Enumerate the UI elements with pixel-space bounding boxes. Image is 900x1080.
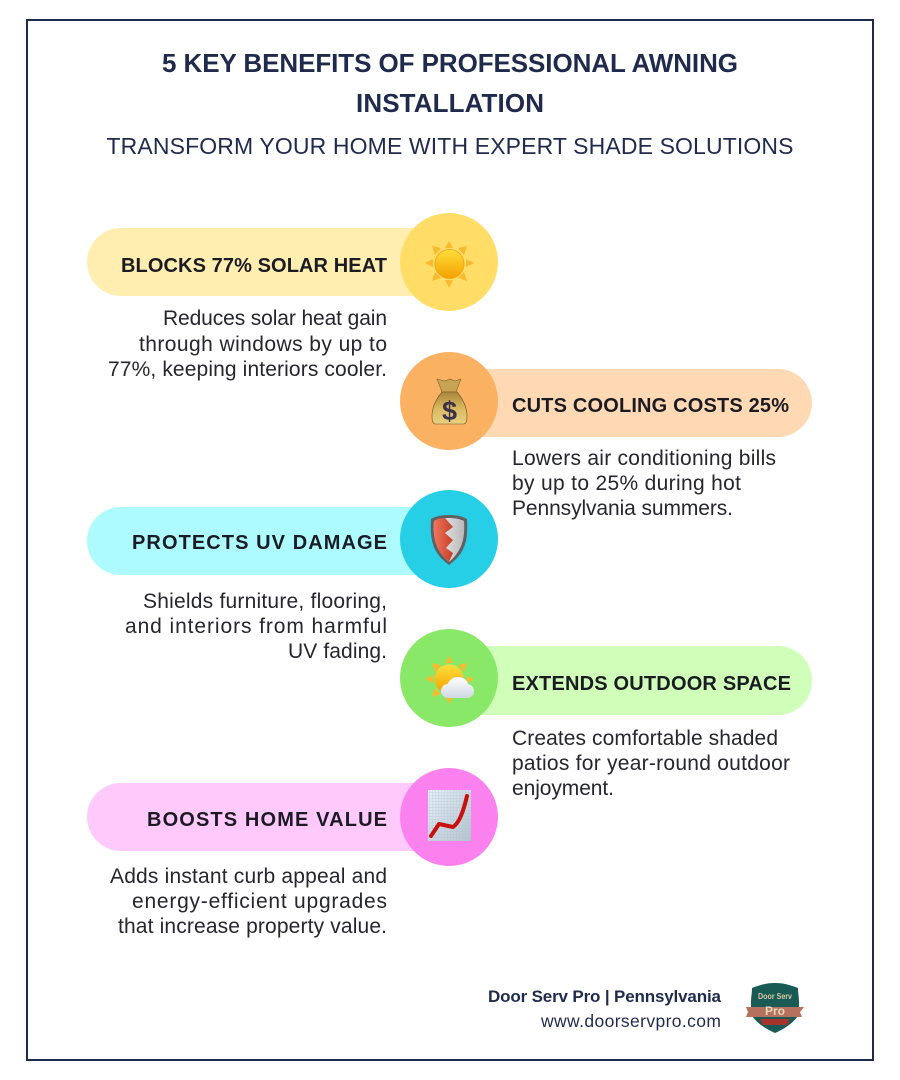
footer: company details	[488, 987, 722, 1031]
description: blocks solar heat: 77%, keeping interiors cooler.	[108, 358, 387, 381]
logo: Door Serv Pro badge	[746, 983, 804, 1033]
title	[162, 48, 738, 118]
pill: blocks solar heat	[87, 228, 447, 296]
pill: boosts home value	[87, 783, 447, 851]
circle: orange	[400, 352, 498, 450]
description: protects UV damage: and interiors from harmful	[125, 615, 387, 638]
icon: sun behind cloud	[425, 656, 474, 704]
icon: sun	[425, 241, 474, 288]
logo: Door Serv Pro badge: Door Serv	[758, 992, 792, 1001]
description: boosts home value	[110, 865, 387, 938]
description: extends outdoor space	[512, 727, 790, 800]
heading: cuts cooling costs: CUTS COOLING COSTS 25%	[512, 395, 789, 417]
title: 5 KEY BENEFITS OF PROFESSIONAL AWNING	[162, 48, 738, 78]
benefit 5: home value	[87, 768, 498, 866]
heading: boosts home value: BOOSTS HOME VALUE	[147, 809, 387, 831]
heading: extends outdoor space: EXTENDS OUTDOOR SPACE	[512, 673, 791, 695]
logo: Door Serv Pro badge: Pro	[765, 1004, 785, 1018]
description: blocks solar heat: Reduces solar heat gain	[163, 307, 387, 330]
icon: shield	[431, 515, 467, 565]
circle: cyan	[400, 490, 498, 588]
description: cuts cooling costs: by up to 25% during hot	[512, 472, 741, 495]
circle: green	[400, 629, 498, 727]
description: boosts home value: energy-efficient upgrades	[132, 890, 387, 913]
pill: extends outdoor space	[452, 646, 812, 715]
heading: protects UV damage: PROTECTS UV DAMAGE	[132, 532, 387, 554]
description: cuts cooling costs: Pennsylvania summers.	[512, 497, 733, 520]
pill: cuts cooling costs	[452, 369, 812, 437]
benefit 4: outdoor space	[400, 629, 812, 727]
title: INSTALLATION	[356, 88, 544, 118]
description: boosts home value: that increase property value.	[118, 915, 387, 938]
description: blocks solar heat	[108, 307, 387, 381]
subtitle: TRANSFORM YOUR HOME WITH EXPERT SHADE SOLUTIONS	[106, 133, 794, 159]
description: blocks solar heat: through windows by up to	[139, 333, 387, 356]
description: extends outdoor space: Creates comfortable shaded	[512, 727, 778, 750]
benefit 1: solar heat	[87, 213, 498, 311]
heading: blocks solar heat: BLOCKS 77% SOLAR HEAT	[121, 255, 387, 277]
description: cuts cooling costs	[512, 447, 776, 520]
icon: money bag	[432, 379, 467, 426]
description: protects UV damage: Shields furniture, flooring,	[143, 590, 387, 613]
footer: company details: www.doorservpro.com	[540, 1011, 721, 1031]
cloud	[441, 677, 474, 698]
description: boosts home value: Adds instant curb appeal and	[110, 865, 387, 888]
description: extends outdoor space: enjoyment.	[512, 777, 614, 800]
description: cuts cooling costs: Lowers air conditioning bills	[512, 447, 776, 470]
footer: company details: Door Serv Pro | Pennsylvania	[488, 987, 722, 1006]
benefit 2: cooling costs	[400, 352, 812, 450]
description: protects UV damage: UV fading.	[288, 640, 387, 663]
circle: yellow	[400, 213, 498, 311]
icon: rising chart	[428, 790, 471, 841]
benefit 3: UV damage	[87, 490, 498, 588]
circle: pink	[400, 768, 498, 866]
pill: protects UV damage	[87, 507, 447, 575]
dollar sign: $	[442, 396, 457, 426]
description: extends outdoor space: patios for year-round outdoor	[512, 752, 790, 775]
description: protects UV damage	[125, 590, 387, 663]
